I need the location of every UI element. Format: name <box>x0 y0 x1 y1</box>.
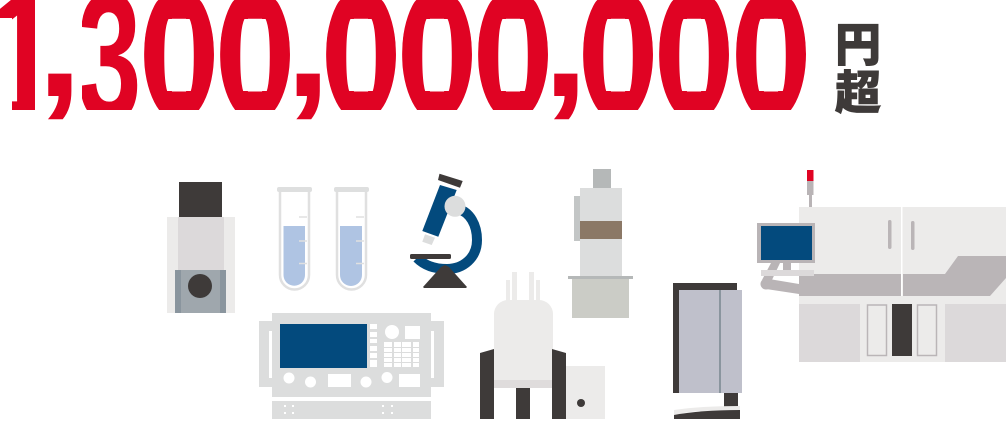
headline number <box>0 0 806 120</box>
unit label <box>835 19 881 119</box>
unit label: 超 <box>835 67 881 119</box>
icon: test tube left <box>277 187 312 290</box>
icon: reactor vessel <box>480 272 605 419</box>
icon: production machine <box>757 170 1006 362</box>
unit label: 円 <box>835 19 881 71</box>
monitor on arm <box>757 223 815 294</box>
icon: rack analyzer <box>259 313 444 419</box>
icon: test tube right <box>334 187 369 290</box>
icon: camera unit <box>167 182 235 313</box>
icon: column instrument <box>568 169 633 318</box>
icon: cabinet with stand <box>673 283 742 419</box>
icon: microscope <box>410 174 477 288</box>
